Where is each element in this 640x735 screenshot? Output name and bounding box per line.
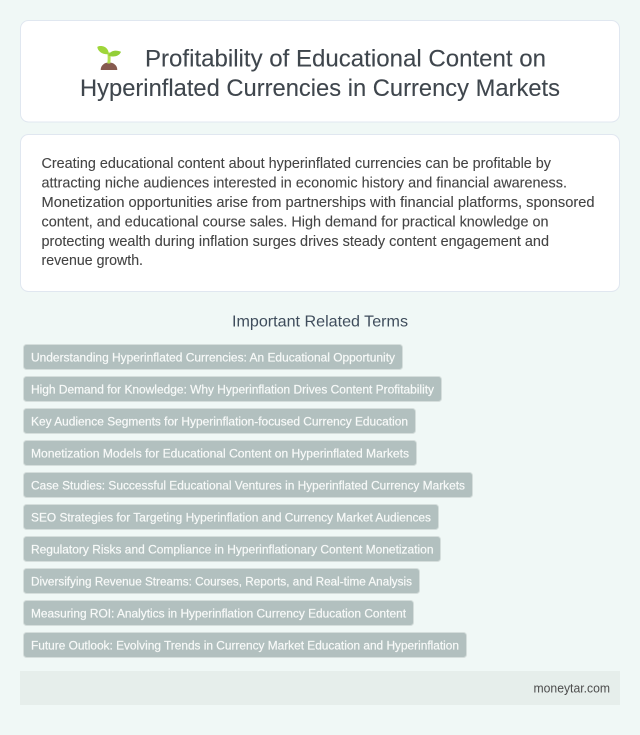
tag 5: Case Studies: Successful Educational Ventures in Hyperinflated Currency Markets (31, 478, 465, 492)
panel: description (20, 134, 620, 292)
tag 1: Understanding Hyperinflated Currencies: An Educational Opportunity (31, 350, 396, 364)
tag 3: Key Audience Segments for Hyperinflation-focused Currency Education (31, 414, 408, 428)
tag 7 (24, 536, 440, 562)
tag 3 (24, 408, 416, 434)
panel: title card (20, 20, 620, 122)
text block: description: Creating educational content about hyperinflated currencies can be profitable by (42, 156, 552, 172)
tag 5 (24, 472, 472, 498)
text block: description: protecting wealth during inflation surges drives steady content engagement and (42, 234, 549, 250)
tag 8 (24, 568, 420, 594)
text block: description: attracting niche audiences interested in economic history and financial awareness. (42, 176, 567, 192)
tag 2: High Demand for Knowledge: Why Hyperinflation Drives Content Profitability (31, 382, 435, 396)
tag 7: Regulatory Risks and Compliance in Hyperinflationary Content Monetization (31, 542, 434, 556)
tag 6: SEO Strategies for Targeting Hyperinflation and Currency Market Audiences (31, 510, 431, 524)
tag 10: Future Outlook: Evolving Trends in Currency Market Education and Hyperinflation (31, 638, 459, 652)
tag 9 (24, 600, 414, 626)
tag 9: Measuring ROI: Analytics in Hyperinflation Currency Education Content (31, 606, 407, 620)
text block: description: Monetization opportunities arise from partnerships with financial platforms, sponsored (42, 195, 594, 211)
tag 6 (24, 504, 438, 530)
tag 4 (24, 440, 416, 466)
title: Profitability of Educational Content on (145, 46, 546, 73)
title (80, 46, 560, 102)
tag 8: Diversifying Revenue Streams: Courses, Reports, and Real-time Analysis (31, 574, 412, 588)
text block: description: revenue growth. (42, 253, 143, 269)
tag 1 (24, 344, 402, 370)
tag 10 (24, 632, 466, 658)
title: Hyperinflated Currencies in Currency Markets (80, 75, 560, 102)
heading: related terms: Important Related Terms (232, 314, 408, 330)
tag 4: Monetization Models for Educational Content on Hyperinflated Markets (31, 446, 409, 460)
footer: moneytar.com (534, 680, 610, 695)
text block: description: content, and educational course sales. High demand for practical knowledge on (42, 214, 548, 230)
text block: description (42, 156, 594, 269)
footer (20, 671, 620, 705)
tag 2 (24, 376, 442, 402)
icon: sprout (97, 46, 121, 70)
list: related terms tags (24, 344, 472, 658)
